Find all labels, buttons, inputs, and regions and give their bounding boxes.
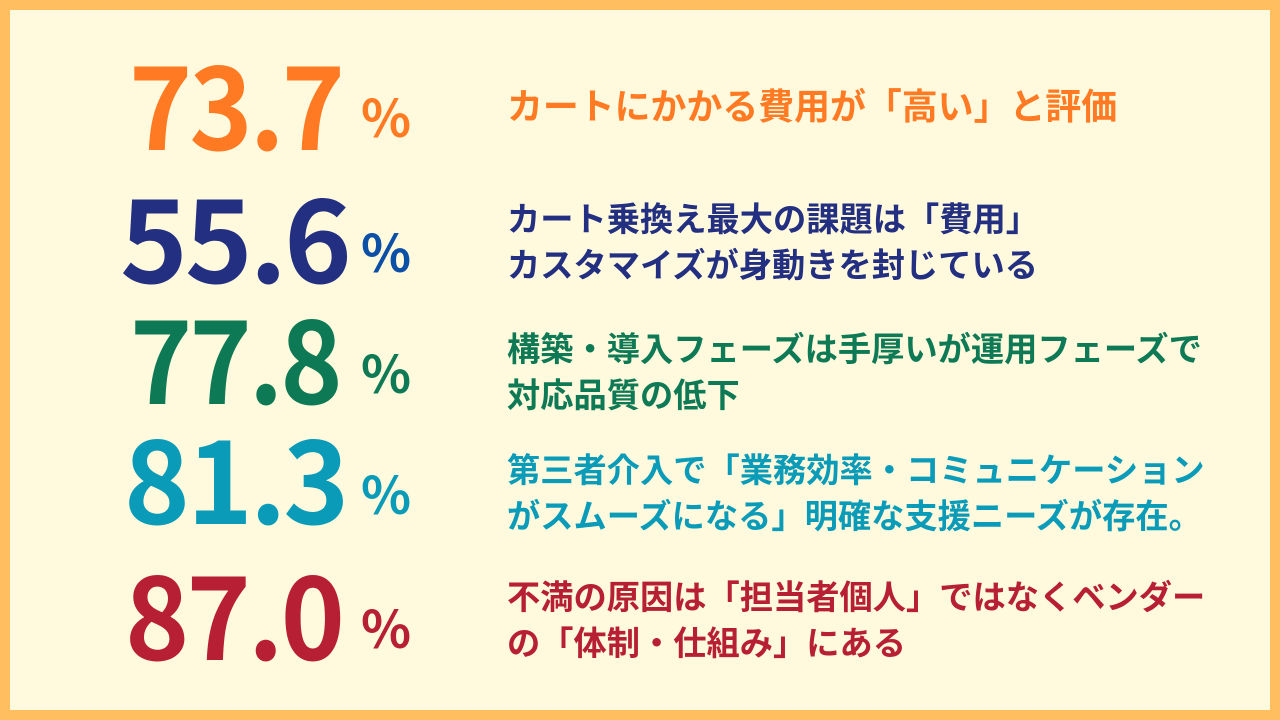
description: 構築・導入フェーズは手厚いが運用フェーズで [507,322,1202,371]
row: 87.0% [125,529,1205,693]
description [507,443,1205,538]
description [507,570,1205,665]
row: 77.8% [130,273,1202,437]
number: 73.7 [129,19,342,183]
percent sign: % [361,454,411,529]
description [507,192,1039,287]
description: 第三者介入で「業務効率・コミュニケーション [507,443,1205,492]
description: がスムーズになる」明確な支援ニーズが存在。 [507,489,1202,538]
number: 55.6 [120,152,349,316]
row: 73.7% [129,19,1117,183]
percent sign: % [361,212,411,287]
description: 不満の原因は「担当者個人」ではなくベンダー [507,570,1205,619]
percent sign: % [361,333,411,408]
description [507,322,1202,417]
description: 対応品質の低下 [507,368,740,417]
row: 55.6% [120,152,1039,316]
description: の「体制・仕組み」にある [507,616,906,665]
description: カート乗換え最大の課題は「費用」 [507,192,1039,241]
number: 87.0 [125,529,342,693]
percent sign: % [361,77,411,152]
description: カスタマイズが身動きを封じている [507,238,1038,287]
number: 77.8 [130,273,340,437]
description: カートにかかる費用が「高い」と評価 [507,78,1117,130]
percent sign: % [361,588,411,663]
number: 81.3 [124,393,346,557]
row: 81.3% [124,393,1205,557]
